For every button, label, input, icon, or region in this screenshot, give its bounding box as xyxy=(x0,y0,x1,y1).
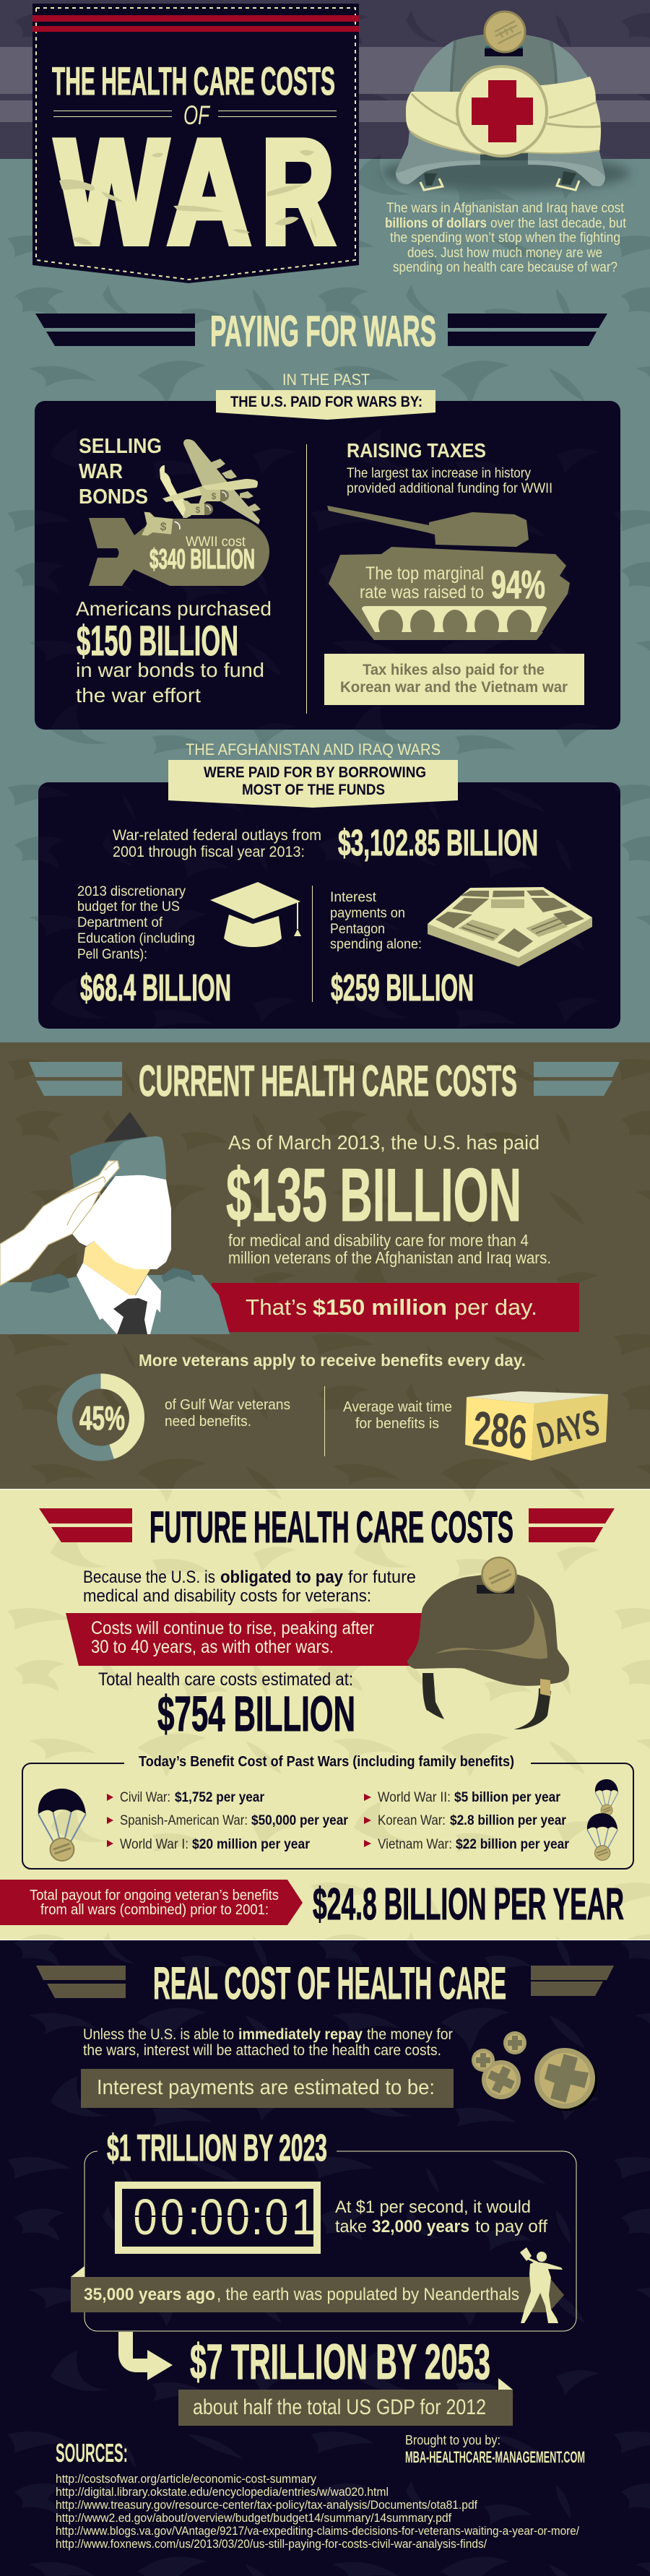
intro paragraph: the spending won’t stop when the fighting xyxy=(390,230,620,246)
text: medical and disability care: million veterans of the Afghanistan and Iraq wars. xyxy=(228,1248,551,1267)
ribbon: Neanderthals: , the earth was populated by Neanderthals xyxy=(217,2285,519,2304)
callout: total payout xyxy=(0,1880,303,1925)
list: source URLs: http://www.blogs.va.gov/VAntage/9217/va-expediting-claims-decisions-for-veterans-waiting-a-year-or-more/ xyxy=(56,2524,579,2538)
title word: war: W xyxy=(56,110,168,275)
text: Gulf War veterans: of Gulf War veterans xyxy=(165,1397,290,1413)
text: unless immediately repaid: the money for xyxy=(367,2026,453,2043)
heading: paying for wars xyxy=(35,307,607,355)
list: left column: $50,000 per year xyxy=(251,1813,349,1828)
list: right column: Vietnam War: xyxy=(378,1837,452,1852)
callout: $150 million per day xyxy=(212,1283,579,1332)
text: war-related outlays xyxy=(113,827,321,860)
intro paragraph: over the last decade, but xyxy=(490,215,627,231)
list: source URLs xyxy=(56,2472,579,2551)
icon: bomber plane dropping bombs xyxy=(142,439,261,540)
ribbon: paid for by borrowing: WERE PAID FOR BY BORROWING xyxy=(204,764,426,781)
icon: graduation cap xyxy=(210,882,301,947)
list: right column: World War II: xyxy=(378,1790,451,1805)
intro paragraph: does. Just how much money are we xyxy=(407,245,602,261)
text: obligated to pay: Because the U.S. is xyxy=(83,1568,215,1587)
text: obligated to pay xyxy=(83,1568,416,1606)
list: left column: Civil War: xyxy=(120,1790,170,1805)
list: right column: Korean War: xyxy=(378,1813,446,1828)
title word: war xyxy=(56,110,334,275)
text: average wait time: Average wait time xyxy=(343,1399,452,1415)
heading: selling war bonds: WAR xyxy=(79,460,123,483)
text: unless immediately repaid: the wars, interest will be attached to the health care costs. xyxy=(83,2042,441,2059)
text: education budget: Education (including xyxy=(77,931,195,946)
callout: half of GDP xyxy=(178,2378,513,2426)
intro paragraph: spending on health care because of war? xyxy=(393,259,618,275)
text: at $1 per second: At $1 per second, it would xyxy=(335,2197,531,2217)
text: war bonds purchased xyxy=(76,597,272,706)
callout: tax hikes xyxy=(324,654,584,705)
icon: digital timer xyxy=(115,2182,321,2254)
tank text: top marginal rate: 94% xyxy=(491,562,545,607)
icon: 286 days box: 286 xyxy=(471,1401,529,1458)
text: Gulf War veterans xyxy=(165,1397,290,1430)
text: unless immediately repaid xyxy=(83,2026,453,2059)
text: obligated to pay: medical and disability costs for veterans: xyxy=(83,1586,371,1606)
callout: $150 million per day: per day. xyxy=(454,1295,537,1320)
text: war bonds purchased: $150 BILLION xyxy=(77,618,238,665)
text: Pentagon interest: spending alone: xyxy=(330,937,422,952)
list: left column: $20 million per year xyxy=(192,1837,311,1852)
text: average wait time xyxy=(343,1399,452,1432)
list: source URLs: http://costsofwar.org/article/economic-cost-summary xyxy=(56,2472,316,2486)
ribbon: Neanderthals: 35,000 years ago xyxy=(84,2285,215,2304)
text: medical and disability care: for medical and disability care for more than 4 xyxy=(228,1231,529,1250)
icon: digital timer: 00:00:01 xyxy=(133,2188,316,2245)
text: at $1 per second: to pay off xyxy=(475,2217,547,2236)
callout: costs will continue to rise: 30 to 40 years, as with other wars. xyxy=(91,1637,334,1657)
text: largest tax increase xyxy=(347,466,552,496)
icon: Neanderthal figure xyxy=(520,2247,563,2323)
text: at $1 per second: take xyxy=(335,2217,367,2236)
callout: costs will continue to rise: Costs will continue to rise, peaking after xyxy=(91,1618,374,1638)
tank text: top marginal rate xyxy=(360,562,545,607)
heading: raising taxes: RAISING TAXES xyxy=(347,439,486,462)
text: war-related outlays: War-related federal outlays from xyxy=(113,827,321,844)
intro paragraph: The wars in Afghanistan and Iraq have cost xyxy=(386,200,625,216)
text: total estimated: Total health care costs estimated at: xyxy=(98,1669,353,1690)
text: Pentagon interest: Interest xyxy=(330,890,377,905)
label: the Afghanistan and Iraq wars: THE AFGHANISTAN AND IRAQ WARS xyxy=(186,740,441,758)
stat: outlays total: $3,102.85 BILLION xyxy=(338,822,538,863)
title word: of: OF xyxy=(183,100,211,130)
text: war-related outlays: 2001 through fiscal year 2013: xyxy=(113,844,305,860)
ribbon: paid for by borrowing xyxy=(168,760,458,808)
text: education budget: 2013 discretionary xyxy=(77,884,186,899)
icon: red cross xyxy=(472,80,533,142)
callout: $150 million per day: $150 million xyxy=(313,1295,447,1320)
icon: helmet badge xyxy=(485,12,525,52)
icon: helmet with medical cross xyxy=(381,12,630,191)
intro paragraph xyxy=(385,200,627,275)
panel: $1 trillion by 2023 xyxy=(71,2127,576,2331)
text: unless immediately repaid: Unless the U.S. is able to xyxy=(83,2026,234,2043)
callout: costs will continue to rise xyxy=(66,1613,433,1666)
panel: benefit cost of past wars xyxy=(22,1754,633,1869)
text: medical and disability care xyxy=(228,1231,551,1267)
intro paragraph: billions of dollars xyxy=(385,215,487,231)
title word: war: R xyxy=(261,110,334,275)
credit: brought to you by xyxy=(405,2433,585,2466)
donut chart: 45 percent: 45% xyxy=(79,1399,125,1437)
text: education budget xyxy=(77,884,195,962)
list: source URLs: http://digital.library.okstate.edu/encyclopedia/entries/w/wa020.html xyxy=(56,2485,389,2499)
stats: education and Pentagon: $68.4 BILLION xyxy=(80,967,231,1009)
tank text: top marginal rate: The top marginal xyxy=(365,563,484,584)
icon: 286 days box xyxy=(465,1391,608,1461)
text: obligated to pay: obligated to pay xyxy=(220,1568,344,1587)
text: unless immediately repaid: immediately repay xyxy=(238,2026,363,2043)
icon: coins xyxy=(472,2031,597,2111)
text: education budget: budget for the US xyxy=(77,899,180,915)
icon: saluting soldier xyxy=(0,1112,230,1334)
text: as of March 2013: As of March 2013, the U.S. has paid xyxy=(228,1131,540,1154)
ribbon: the U.S. paid for wars by xyxy=(216,390,436,420)
callout: total payout: from all wars (combined) prior to 2001: xyxy=(40,1902,269,1918)
callout: half of GDP: about half the total US GDP for 2012 xyxy=(193,2395,486,2419)
list: source URLs: http://www.treasury.gov/resource-center/tax-policy/tax-analysis/Documents/ota81.pdf xyxy=(56,2498,477,2512)
credit: brought to you by: Brought to you by: xyxy=(405,2433,500,2447)
bomb text: $340 billion: $340 BILLION xyxy=(150,544,255,575)
list: left column: Spanish-American War: xyxy=(120,1813,248,1828)
icon: helmet badge xyxy=(482,1557,516,1592)
list: source URLs: http://www2.ed.gov/about/overview/budget/budget14/summary/14summary.pdf xyxy=(56,2511,451,2525)
icon: 286 days box: DAYS xyxy=(533,1402,603,1456)
stat: $754 billion: $754 BILLION xyxy=(157,1686,355,1742)
callout: tax hikes: Korean war and the Vietnam war xyxy=(340,679,568,696)
callout: $150 million per day: That’s xyxy=(246,1295,307,1320)
text: war bonds purchased: Americans purchased xyxy=(76,597,272,620)
icon: large bomb xyxy=(89,518,269,586)
text: Pentagon interest: Pentagon xyxy=(330,922,385,937)
text: war bonds purchased: the war effort xyxy=(76,684,201,706)
icon: small parachute medal xyxy=(595,1779,618,1816)
icon: army helmet xyxy=(407,1557,569,1729)
stats: education and Pentagon: $259 BILLION xyxy=(331,967,474,1009)
text: obligated to pay: for future xyxy=(348,1568,416,1587)
list: left column: $1,752 per year xyxy=(175,1790,265,1805)
list: right column: $2.8 billion per year xyxy=(450,1813,567,1828)
donut chart: 45 percent xyxy=(65,1381,137,1453)
panel heading: Today’s Benefit Cost of Past Wars (including family benefits) xyxy=(139,1754,514,1770)
panel heading: $1 TRILLION BY 2023 xyxy=(107,2127,327,2169)
panel: how the U.S. paid in the past xyxy=(35,390,620,730)
icon: tank xyxy=(327,506,570,640)
ribbon: the U.S. paid for wars by: THE U.S. PAID FOR WARS BY: xyxy=(230,394,422,410)
icon: large parachute medal xyxy=(38,1789,86,1861)
list: left column xyxy=(107,1790,349,1852)
ribbon: Neanderthals xyxy=(71,2266,564,2312)
callout: tax hikes: Tax hikes also paid for the xyxy=(363,662,545,678)
callout: total payout: Total payout for ongoing veteran’s benefits xyxy=(30,1888,279,1903)
title word: war: A xyxy=(168,110,250,275)
text: at $1 per second: 32,000 years xyxy=(372,2217,469,2236)
list: right column: $5 billion per year xyxy=(454,1790,561,1805)
icon: Pentagon building xyxy=(428,887,592,967)
arrow: to 2053 xyxy=(118,2332,173,2380)
text: Pentagon interest: payments on xyxy=(330,906,405,921)
list: right column xyxy=(364,1790,570,1852)
list: source URLs: http://www.foxnews.com/us/2013/03/20/us-still-paying-for-costs-civil-war-analysis-finds/ xyxy=(56,2537,487,2551)
tank text: top marginal rate: rate was raised to xyxy=(360,582,484,602)
text: education budget: Pell Grants): xyxy=(77,947,147,962)
text: at $1 per second xyxy=(335,2197,547,2236)
title banner xyxy=(32,4,359,283)
callout: interest payments xyxy=(81,2069,454,2108)
list: right column: $22 billion per year xyxy=(456,1837,570,1852)
heading: selling war bonds xyxy=(79,435,162,509)
callout: interest payments: Interest payments are estimated to be: xyxy=(97,2076,435,2099)
ribbon: paid for by borrowing: MOST OF THE FUNDS xyxy=(242,782,385,798)
list: left column: World War I: xyxy=(120,1837,188,1852)
heading: selling war bonds: SELLING xyxy=(79,435,162,458)
heading: sources: SOURCES: xyxy=(56,2438,128,2468)
icon: medium parachute medal xyxy=(587,1813,618,1860)
label: in the past: IN THE PAST xyxy=(282,371,370,389)
text: education budget: Department of xyxy=(77,915,163,930)
text: average wait time: for benefits is xyxy=(355,1416,439,1432)
heading: paying for wars: PAYING FOR WARS xyxy=(210,307,436,355)
text: Gulf War veterans: need benefits. xyxy=(165,1414,251,1430)
panel: borrowing xyxy=(38,760,620,1029)
title line: the health care costs: THE HEALTH CARE COSTS xyxy=(52,59,335,103)
text: largest tax increase: The largest tax increase in history xyxy=(347,466,531,481)
text: largest tax increase: provided additional funding for WWII xyxy=(347,481,552,496)
stats: education and Pentagon xyxy=(80,967,474,1009)
bomb text: WWII cost: WWII cost xyxy=(186,535,246,550)
text: Pentagon interest xyxy=(330,890,422,952)
heading: selling war bonds: BONDS xyxy=(79,485,148,509)
text: more veterans apply: More veterans apply to receive benefits every day. xyxy=(139,1351,526,1370)
text: war bonds purchased: in war bonds to fund xyxy=(76,659,264,681)
